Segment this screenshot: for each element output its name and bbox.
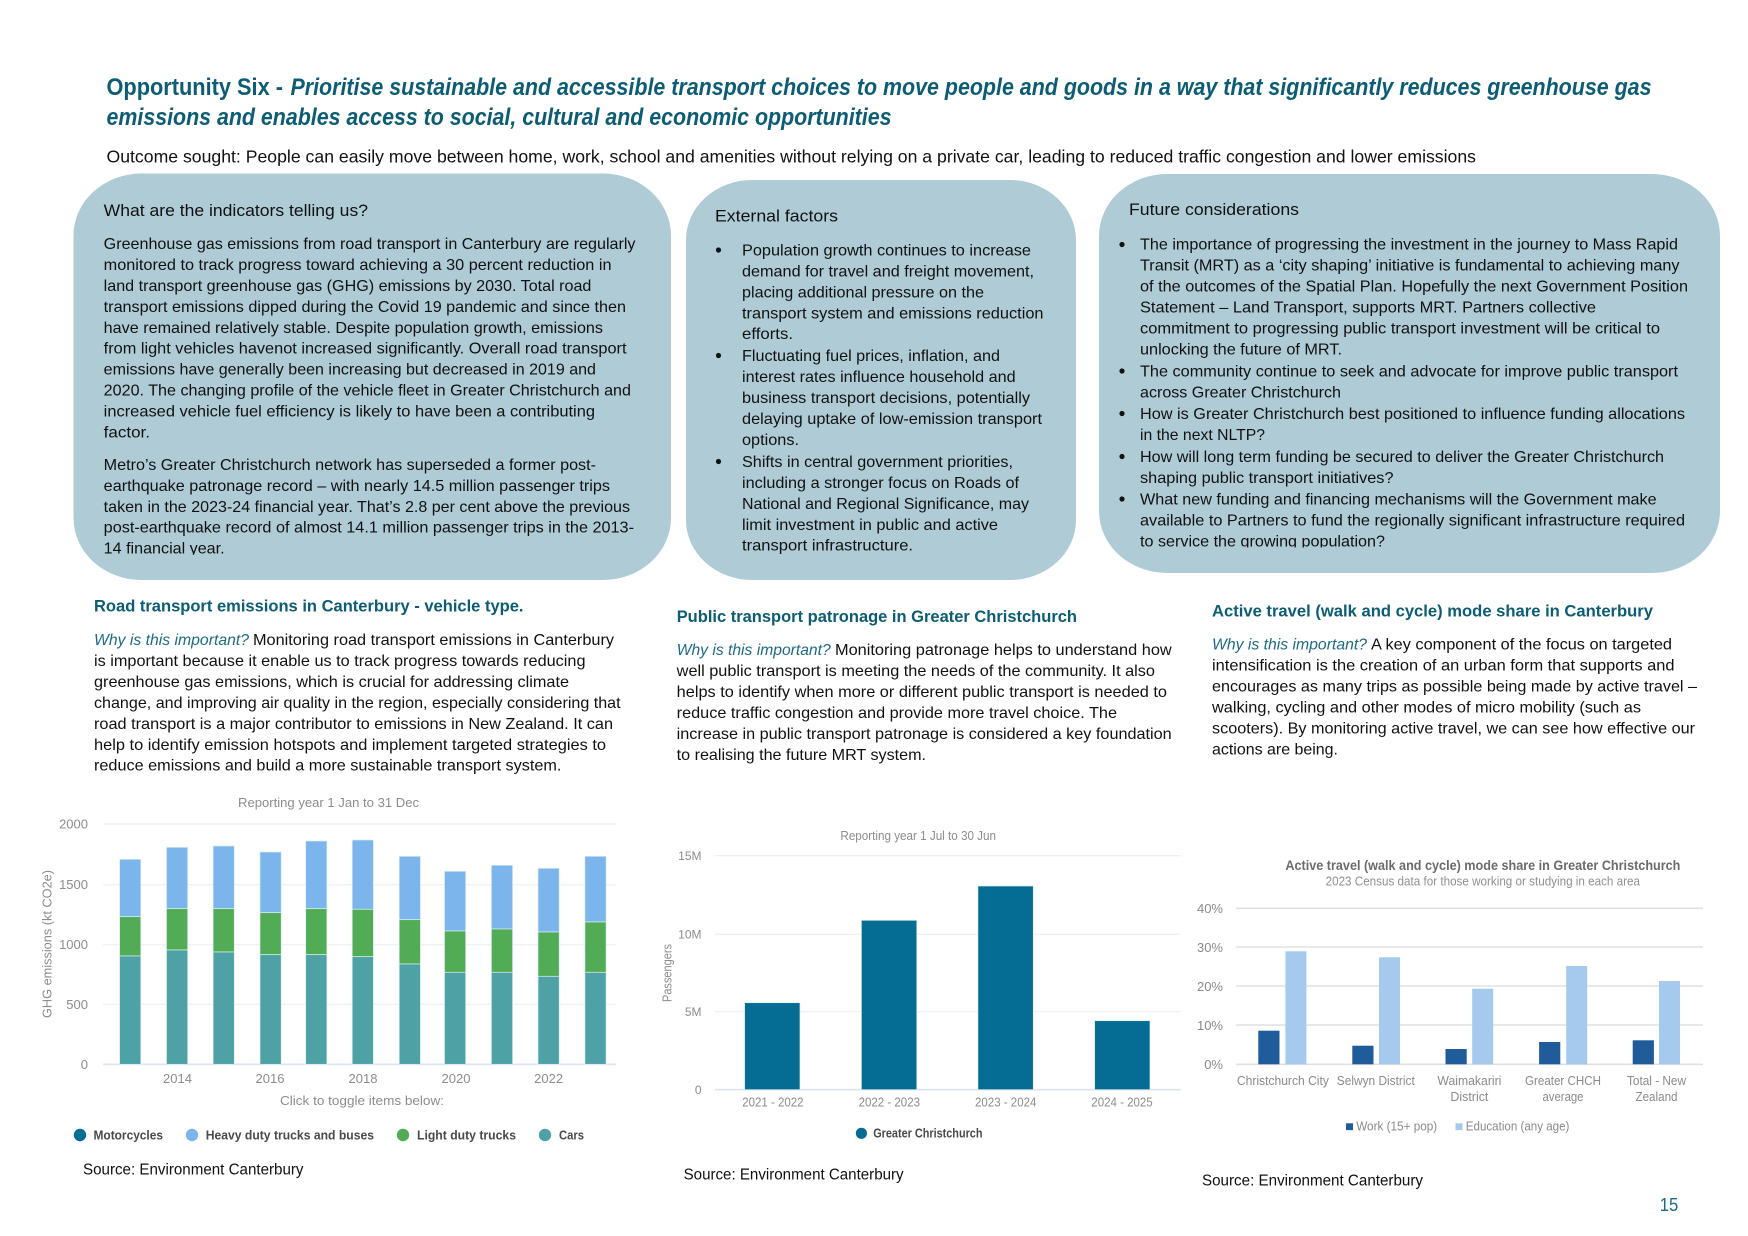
x axis labels: 2023 - 2024 <box>975 1095 1036 1110</box>
bullet: government priorities: National and Regional Significance, may <box>742 496 1029 513</box>
y axis labels: 20% <box>1197 979 1223 994</box>
legend: Heavy duty trucks and buses <box>206 1128 374 1142</box>
y axis labels: 30% <box>1197 940 1223 955</box>
x axis labels: 2020 <box>442 1071 470 1086</box>
x axis labels: Total - New <box>1627 1073 1687 1088</box>
why is this important text: Why is this important? <box>94 632 249 649</box>
legend: Light duty trucks <box>417 1128 516 1142</box>
x axis labels <box>742 1095 1153 1110</box>
page number: 15 <box>1660 1195 1678 1215</box>
bullet: fuel prices: interest rates influence household and <box>742 369 1016 386</box>
y axis labels: 0% <box>1204 1057 1223 1072</box>
panel background <box>1099 174 1720 573</box>
x axis labels: 2022 <box>534 1071 563 1086</box>
x axis labels: Selwyn District <box>1337 1073 1415 1088</box>
why is this important text: reduce traffic congestion and provide more travel choice. The <box>677 705 1117 722</box>
bullet: mass rapid transit: of the outcomes of the Spatial Plan. Hopefully the next Government Position <box>1140 279 1688 296</box>
paragraph: patronage <box>100 457 634 561</box>
bullet: government priorities: transport infrastructure. <box>742 538 913 555</box>
paragraph: patronage: 14 financial year. <box>104 541 225 558</box>
legend prompt: Click to toggle items below: <box>280 1093 444 1108</box>
chart subtitle: Reporting year 1 Jan to 31 Dec <box>238 795 420 810</box>
y axis title: GHG emissions (kt CO2e) <box>40 870 54 1018</box>
why is this important text: intensification is the creation of an urban form that supports and <box>1212 657 1674 674</box>
bullet: government priorities: limit investment in public and active <box>742 517 998 534</box>
section heading: Active travel (walk and cycle) mode share in Canterbury <box>1212 602 1654 620</box>
x axis labels: District <box>1450 1089 1489 1104</box>
bullet: funding allocations <box>1119 406 1685 444</box>
x axis labels: 2024 - 2025 <box>1091 1095 1153 1110</box>
bullet: mass rapid transit: Transit (MRT) as a ‘city shaping’ initiative is fundamental to achieving many <box>1140 258 1680 275</box>
section heading: Public transport patronage in Greater Christchurch <box>677 607 1077 626</box>
legend: Greater Christchurch <box>873 1126 983 1140</box>
title: emissions and enables access to social, cultural and economic opportunities <box>106 104 892 131</box>
why is this important text: help to identify emission hotspots and implement targeted strategies to <box>94 737 606 754</box>
why is this important text: actions are being. <box>1212 741 1338 758</box>
x axis labels <box>163 1071 563 1086</box>
panel heading: Future considerations <box>1129 200 1299 219</box>
paragraph: emissions: increased vehicle fuel efficiency is likely to have been a contributing <box>104 404 595 421</box>
paragraph: emissions: transport emissions dipped during the Covid 19 pandemic and since then <box>104 299 626 316</box>
bullet: financing mechanisms: to service the growing population? <box>1140 533 1385 550</box>
source note: Source: Environment Canterbury <box>684 1166 904 1184</box>
x axis labels: 2021 - 2022 <box>742 1095 804 1110</box>
why is this important text: Why is this important? <box>1212 636 1367 653</box>
why is this important text: encourages as many trips as possible being made by active travel – <box>1212 678 1697 695</box>
legend <box>1346 1119 1569 1134</box>
stacked bar chart: emissions by vehicle type <box>40 795 616 1142</box>
bullet: fuel prices <box>716 348 1043 449</box>
why is this important text: walking, cycling and other modes of micro mobility (such as <box>1211 699 1641 716</box>
bars <box>745 886 1150 1090</box>
x axis labels: 2014 <box>163 1071 192 1086</box>
legend: Work (15+ pop) <box>1356 1119 1437 1134</box>
bullet: community advocacy: The community continue to seek and advocate for improve public transport <box>1140 364 1679 380</box>
why is this important text <box>676 642 1172 764</box>
bullet: fuel prices: options. <box>742 432 799 449</box>
x axis labels <box>1237 1073 1687 1104</box>
panel background <box>74 174 671 580</box>
chart subtitle: 2023 Census data for those working or studying in each area <box>1326 875 1640 889</box>
bullet: government priorities <box>716 454 1029 555</box>
x axis labels: Zealand <box>1636 1089 1678 1104</box>
y axis labels <box>1197 901 1223 1072</box>
bullet: population growth: efforts. <box>742 326 793 343</box>
why is this important text: Monitoring patronage helps to understand how <box>835 642 1172 659</box>
y axis labels: 5M <box>685 1005 702 1019</box>
bullet: population growth: transport system and emissions reduction <box>742 305 1044 322</box>
paragraph: emissions: from light vehicles havenot increased significantly. Overall road transport <box>104 341 627 358</box>
title <box>106 74 1652 131</box>
bullet: mass rapid transit: Statement – Land Transport, supports MRT. Partners collective <box>1140 300 1596 316</box>
bullet: financing mechanisms: available to Partners to fund the regionally significant infrastructure required <box>1140 512 1685 529</box>
paragraph: patronage: post-earthquake record of almost 14.1 million passenger trips in the 2013- <box>104 520 634 537</box>
panel heading: External factors <box>715 206 838 226</box>
source note: Source: Environment Canterbury <box>83 1162 304 1178</box>
paragraph: emissions: factor. <box>104 424 150 442</box>
paragraph: emissions: monitored to track progress toward achieving a 30 percent reduction in <box>104 257 611 274</box>
bullet: mass rapid transit: commitment to progressing public transport investment will be critical to <box>1140 320 1660 338</box>
bars: light duty trucks <box>120 909 606 976</box>
x axis labels: 2022 - 2023 <box>859 1095 920 1110</box>
bullet: long term funding: shaping public transport initiatives? <box>1140 470 1394 487</box>
bullet: funding allocations: How is Greater Christchurch best positioned to influence funding allocations <box>1140 406 1685 423</box>
bar chart: passengers per year <box>660 828 1181 1140</box>
x axis labels: Waimakariri <box>1437 1073 1501 1088</box>
bullet: community advocacy: across Greater Christchurch <box>1140 384 1341 401</box>
bullet: mass rapid transit <box>1119 237 1688 358</box>
why is this important text: is important because it enable us to track progress towards reducing <box>94 653 586 670</box>
paragraph: emissions: land transport greenhouse gas (GHG) emissions by 2030. Total road <box>104 278 591 295</box>
why is this important text: Monitoring road transport emissions in Canterbury <box>253 632 614 649</box>
why is this important text: reduce emissions and build a more sustainable transport system. <box>94 758 561 774</box>
bars: heavy duty trucks and buses <box>120 840 606 932</box>
why is this important text: helps to identify when more or different public transport is needed to <box>677 684 1167 701</box>
legend: Education (any age) <box>1466 1119 1569 1134</box>
panel: external factors <box>686 180 1076 580</box>
bullet: community advocacy <box>1119 364 1679 401</box>
paragraph: patronage: taken in the 2023-24 financial year. That’s 2.8 per cent above the previous <box>104 499 630 516</box>
bullet: mass rapid transit: The importance of progressing the investment in the journey to Mass Rapid <box>1140 237 1678 254</box>
bullet: fuel prices: delaying uptake of low-emission transport <box>742 411 1043 428</box>
why is this important text: road transport is a major contributor to emissions in New Zealand. It can <box>94 716 613 733</box>
chart title: Active travel (walk and cycle) mode share in Greater Christchurch <box>1285 858 1680 873</box>
bullet: mass rapid transit: unlocking the future of MRT. <box>1140 341 1342 358</box>
paragraph: emissions: have remained relatively stable. Despite population growth, emissions <box>104 320 603 337</box>
y axis labels: 0 <box>695 1083 702 1097</box>
x axis labels: average <box>1542 1089 1584 1104</box>
why is this important text: well public transport is meeting the needs of the community. It also <box>676 663 1155 680</box>
bullet: long term funding <box>1119 449 1664 487</box>
legend: Cars <box>559 1128 584 1142</box>
why is this important text: to realising the future MRT system. <box>677 747 926 764</box>
panel background <box>686 180 1076 580</box>
bullet: fuel prices: Fluctuating fuel prices, inflation, and <box>742 348 1000 365</box>
paragraph: emissions: Greenhouse gas emissions from road transport in Canterbury are regularly <box>104 236 635 253</box>
panel: future considerations <box>1099 174 1720 573</box>
bullet: financing mechanisms <box>1119 491 1685 553</box>
bars: work <box>1258 1031 1654 1064</box>
bullet: financing mechanisms: What new funding and financing mechanisms will the Government make <box>1140 491 1657 508</box>
y axis labels: 0 <box>81 1057 88 1072</box>
why is this important text: increase in public transport patronage is considered a key foundation <box>677 726 1172 743</box>
why is this important text: Why is this important? <box>677 642 831 659</box>
paragraph: emissions: 2020. The changing profile of the vehicle fleet in Greater Christchurch and <box>104 383 631 400</box>
bullet: population growth: demand for travel and freight movement, <box>742 264 1034 280</box>
bar chart: active travel mode share <box>1197 858 1703 1134</box>
source note: Source: Environment Canterbury <box>1202 1172 1423 1189</box>
title: Opportunity Six - <box>106 74 283 101</box>
why is this important text <box>1211 636 1697 758</box>
x axis labels: Greater CHCH <box>1525 1073 1601 1088</box>
why is this important text: scooters). By monitoring active travel, we can see how effective our <box>1212 720 1696 737</box>
outcome sought text: Outcome sought: People can easily move between home, work, school and amenities without relying on a private car, leading to reduced traffic congestion and lower emissions <box>106 146 1476 166</box>
bars: cars <box>120 950 606 1064</box>
y axis labels: 10M <box>678 928 702 942</box>
x axis labels: 2018 <box>349 1071 377 1086</box>
bullet: government priorities: Shifts in central government priorities, <box>742 454 1013 471</box>
y axis labels: 1000 <box>59 937 88 952</box>
y axis labels <box>59 816 88 1072</box>
why is this important text <box>94 632 621 774</box>
y axis labels: 15M <box>678 849 702 863</box>
y axis labels: 1500 <box>59 877 88 892</box>
y axis labels: 500 <box>66 997 88 1012</box>
paragraph: emissions: emissions have generally been increasing but decreased in 2019 and <box>104 362 596 379</box>
bullet: population growth <box>716 242 1044 343</box>
y axis title: Passengers <box>660 944 674 1002</box>
paragraph: patronage: Metro’s Greater Christchurch network has superseded a former post- <box>104 457 596 474</box>
why is this important text: greenhouse gas emissions, which is crucial for addressing climate <box>94 674 569 691</box>
bullet: population growth: Population growth continues to increase <box>742 242 1031 260</box>
bullet: government priorities: including a stronger focus on Roads of <box>742 475 1020 492</box>
bullet: fuel prices: business transport decisions, potentially <box>742 390 1030 407</box>
y axis labels: 10% <box>1197 1018 1223 1033</box>
y axis labels: 2000 <box>59 816 88 832</box>
panel heading: What are the indicators telling us? <box>104 201 368 220</box>
why is this important text: A key component of the focus on targeted <box>1371 636 1672 653</box>
bullet: population growth: placing additional pressure on the <box>742 284 984 301</box>
chart subtitle: Reporting year 1 Jul to 30 Jun <box>840 828 996 843</box>
x axis labels: 2016 <box>256 1071 284 1086</box>
bullet: funding allocations: in the next NLTP? <box>1140 427 1265 444</box>
section heading: Road transport emissions in Canterbury - vehicle type. <box>94 596 524 616</box>
section: road transport emissions <box>40 596 621 1178</box>
paragraph: patronage: earthquake patronage record – with nearly 14.5 million passenger trips <box>104 478 610 495</box>
section: active travel <box>1197 602 1703 1189</box>
x axis labels: Christchurch City <box>1237 1073 1329 1088</box>
y axis labels: 40% <box>1197 901 1223 916</box>
y axis labels <box>678 849 702 1097</box>
bullet: long term funding: How will long term funding be secured to deliver the Greater Christchurch <box>1140 449 1664 466</box>
legend: Motorcycles <box>94 1128 163 1142</box>
paragraph: emissions <box>104 236 635 442</box>
panel: indicators <box>74 174 671 580</box>
bars: education <box>1285 951 1680 1064</box>
why is this important text: change, and improving air quality in the region, especially considering that <box>94 695 621 712</box>
section: public transport patronage <box>660 607 1181 1184</box>
legend <box>74 1128 584 1142</box>
